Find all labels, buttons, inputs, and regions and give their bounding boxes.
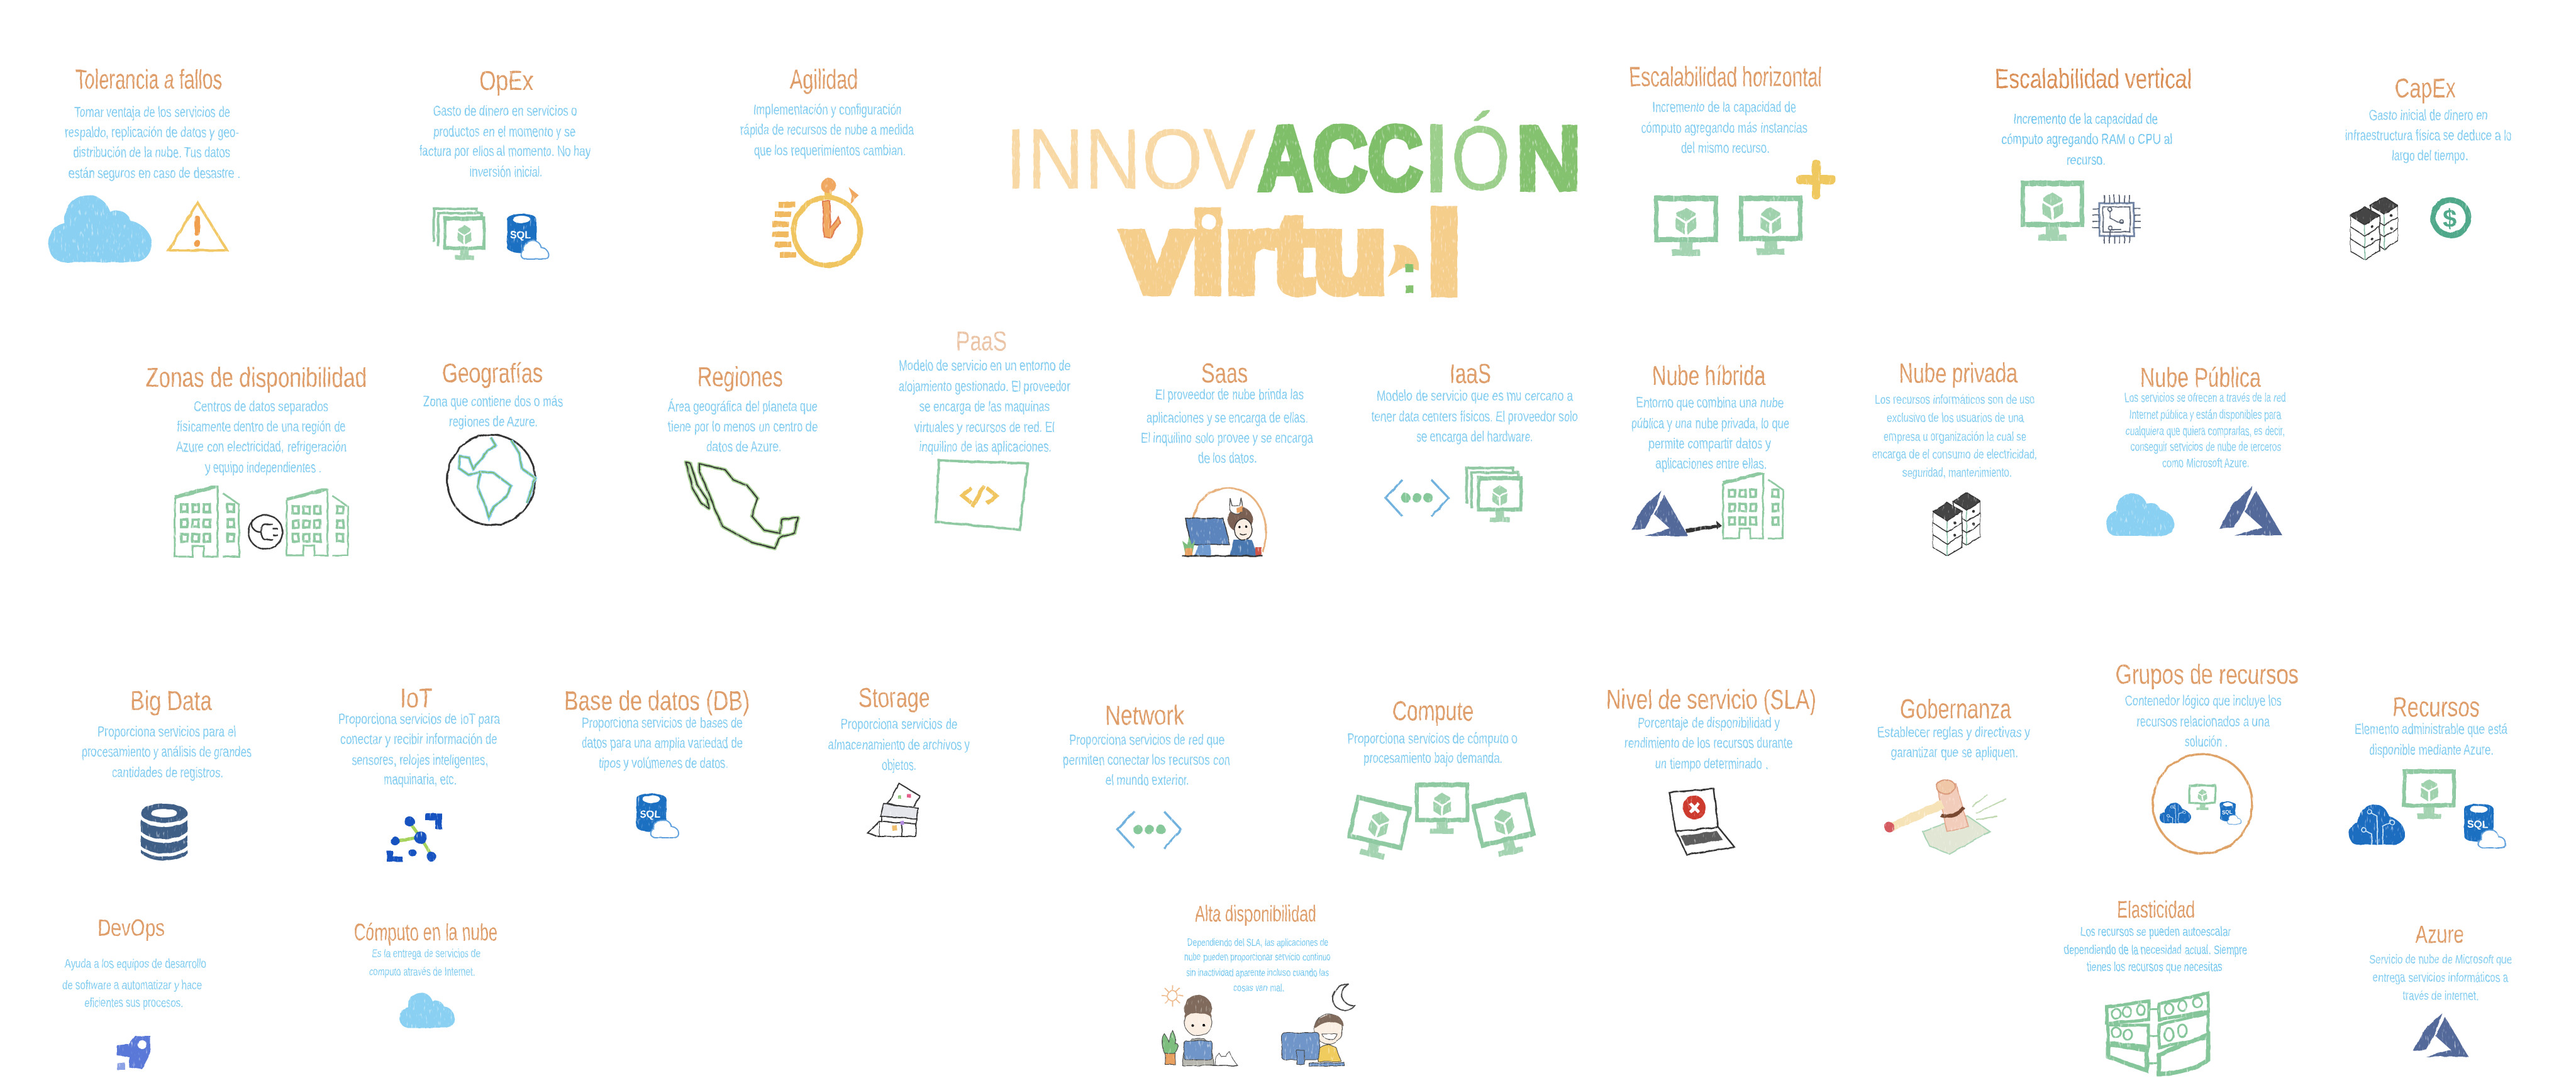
panel: Escalabilidad horizontal (1629, 62, 1836, 256)
description: objetos. (882, 757, 916, 773)
heading: Recursos (2392, 692, 2480, 723)
description: se encarga del hardware. (1416, 428, 1533, 445)
description (176, 398, 347, 475)
description: el mundo exterior. (1106, 772, 1189, 788)
icon: person at computer with cat (1182, 488, 1266, 556)
description (740, 101, 914, 158)
icon: chip (2092, 195, 2141, 243)
heading: Nivel de servicio (SLA) (1606, 684, 1816, 715)
description (82, 723, 252, 781)
icon: plug (248, 515, 282, 549)
panel: IaaS (1372, 358, 1578, 522)
icon: building (1723, 472, 1783, 538)
description: Gasto de dinero en servicios o (433, 103, 577, 119)
icon: sun (1162, 985, 1183, 1006)
description (899, 357, 1070, 455)
description: seguridad, mantenimiento. (1902, 466, 2012, 480)
description: almacenamiento de archivos y (828, 736, 970, 753)
icon: elastic servers (2107, 993, 2208, 1074)
description: tipos y volúmenes de datos. (599, 755, 728, 771)
description: Tomar ventaja de los servicios de (74, 104, 230, 120)
description: inversión inicial. (470, 164, 543, 180)
description: Área geográfica del planeta que (668, 398, 818, 414)
description (423, 393, 563, 430)
icon: virtual machines (1467, 468, 1523, 522)
icon: SQL database (2464, 804, 2506, 848)
title letter l: l (1429, 192, 1460, 316)
panel: Nube privada (1872, 358, 2037, 556)
heading: Nube híbrida (1652, 360, 1765, 391)
description: través de internet. (2403, 989, 2479, 1003)
icon: virtual machines (434, 209, 486, 260)
icon: monitor (2402, 769, 2456, 819)
heading: CapEx (2395, 73, 2456, 104)
heading: Nube Pública (2140, 362, 2261, 393)
description: del mismo recurso. (1681, 140, 1770, 156)
description (1347, 730, 1518, 766)
description: El inquilino solo provee y se encarga (1141, 430, 1313, 446)
description (582, 714, 743, 771)
description: de software a automatizar y hace (62, 979, 202, 992)
panel: Gobernanza (1877, 694, 2030, 854)
description: Es la entrega de servicios de (372, 947, 480, 960)
panel: DevOps (62, 915, 206, 1070)
description: datos para una amplia variedad de (582, 735, 743, 751)
description: tener data centers físicos. El proveedor solo (1372, 408, 1578, 425)
description: dependiendo de la necesidad actual. Siempre (2064, 943, 2247, 957)
description: recurso. (2067, 152, 2106, 168)
panel: Geografías (423, 358, 563, 525)
icon: dollar coin: $ (2443, 205, 2457, 233)
description (2124, 391, 2286, 470)
description: respaldo, replicación de datos y geo- (65, 124, 239, 140)
panel: Saas (1141, 358, 1313, 556)
description: rápida de recursos de nube a medida (740, 121, 914, 138)
description: cualquiera que quiera comprarlas, es decir, (2126, 425, 2285, 438)
description: Establecer reglas y directivas y (1877, 724, 2030, 740)
icon: building 2 (287, 489, 348, 555)
panel: Grupos de recursos (2116, 659, 2299, 853)
heading: Compute (1392, 696, 1474, 726)
description: nube pueden proporcionar servicio continuo (1184, 951, 1331, 963)
icon: cloud (48, 195, 152, 262)
icon: building 1 (175, 486, 239, 557)
heading: OpEx (479, 65, 533, 96)
description: conseguir servicios de nube de terceros (2131, 440, 2281, 454)
description: cómputo agregando más instancias (1641, 119, 1807, 136)
description (1877, 724, 2030, 760)
description: conectar y recibir información de (340, 731, 497, 747)
description: solución . (2185, 733, 2228, 750)
heading: Big Data (130, 686, 212, 716)
heading: Zonas de disponibilidad (146, 362, 367, 393)
icon: network (1385, 480, 1448, 516)
panel: Nube Pública (2106, 362, 2286, 536)
panel: CapEx (2345, 73, 2512, 260)
description: infraestructura física se deduce a lo (2345, 127, 2512, 143)
icon: SQL database (636, 794, 679, 838)
title letter: Ó: Ó (1451, 107, 1511, 209)
icon: monitor (2021, 181, 2084, 241)
panel: Azure (2369, 921, 2512, 1057)
description: encarga de el consumo de electricidad, (1872, 448, 2037, 462)
description: procesamiento bajo demanda. (1363, 750, 1502, 766)
description: permite compartir datos y (1648, 435, 1771, 452)
description: Proporciona servicios de bases de (582, 714, 743, 731)
icon: Azure logo (2413, 1013, 2468, 1057)
description: Incremento de la capacidad de (1652, 99, 1796, 115)
description: disponible mediante Azure. (2369, 742, 2494, 758)
description (1184, 936, 1331, 994)
description: Zona que contiene dos o más (423, 393, 563, 409)
panel: IoT (338, 683, 500, 862)
description: Proporciona servicios de IoT para (338, 711, 500, 727)
icon: plus (1796, 160, 1836, 199)
description (65, 104, 240, 181)
description: Dependiendo del SLA, las aplicaciones de (1187, 936, 1328, 948)
panel: Network (1063, 700, 1230, 848)
description: aplicaciones entre ellas. (1656, 455, 1767, 472)
description: tienes los recursos que necesitas (2087, 960, 2223, 974)
title word: N: N (1516, 107, 1582, 209)
description: eficientes sus procesos. (84, 996, 183, 1010)
panel: Zonas de disponibilidad (146, 362, 367, 557)
heading: Grupos de recursos (2116, 659, 2299, 690)
description: entrega servicios informáticos a (2373, 971, 2509, 985)
icon: SQL database (2220, 801, 2241, 824)
description: cantidades de registros. (112, 764, 223, 781)
description: que los requerimientos cambian. (754, 142, 906, 158)
description: Servicio de nube de Microsoft que (2369, 953, 2512, 967)
description: inquilino de las aplicaciones. (919, 438, 1052, 455)
description: Proporciona servicios para el (97, 723, 236, 740)
description (1631, 394, 1789, 472)
description: Azure con electricidad, refrigeración (176, 438, 347, 455)
description: Contenedor lógico que incluye los (2125, 692, 2282, 709)
description: Internet pública y están disponibles para (2129, 408, 2282, 422)
panel: Alta disponibilidad (1162, 901, 1355, 1066)
description: Proporciona servicios de red que (1069, 731, 1224, 748)
heading: Saas (1201, 358, 1248, 389)
description: tiene por lo menos un centro de (668, 418, 818, 435)
description: cosas van mal. (1233, 982, 1284, 994)
title word: virtu: virtu (1123, 192, 1387, 316)
icon: SQL database (507, 214, 548, 259)
description: largo del tiempo. (2392, 147, 2468, 164)
panel: Compute (1344, 696, 1539, 864)
heading: Cómputo en la nube (354, 920, 497, 946)
panel: Storage (828, 682, 970, 836)
icon: globe (447, 435, 535, 525)
icon: laptop with error (1669, 789, 1735, 855)
description: Proporciona servicios de cómputo o (1347, 730, 1518, 747)
icon: SQL database: SQL (2222, 809, 2233, 815)
heading: Base de datos (DB) (564, 686, 750, 716)
description: sensores, relojes inteligentes, (352, 752, 488, 768)
panel: Base de datos (DB) (564, 686, 750, 838)
description (2064, 925, 2247, 974)
description: Centros de datos separados (194, 398, 328, 414)
icon: centre monitor (1415, 782, 1469, 834)
description: físicamente dentro de una región de (177, 418, 346, 435)
description: empresa u organización la cual se (1884, 430, 2026, 444)
heading: PaaS (956, 326, 1007, 357)
description (1641, 99, 1807, 156)
icon: Azure logo (2219, 486, 2282, 535)
description (1063, 731, 1230, 788)
heading: Nube privada (1899, 358, 2018, 389)
description: factura por ellos al momento. No hay (419, 143, 591, 159)
description: procesamiento y análisis de grandes (82, 743, 252, 760)
description (2125, 692, 2282, 750)
icon: person at monitor (1282, 1014, 1345, 1066)
icon: monitor 2 (1739, 196, 1802, 255)
description: garantizar que se apliquen. (1891, 744, 2018, 760)
panel: Elasticidad (2064, 897, 2247, 1074)
icon: moon (1333, 984, 1355, 1010)
icon: Mexico map (686, 462, 798, 548)
panel: OpEx (419, 65, 591, 260)
description: Gasto inicial de dinero en (2369, 107, 2488, 123)
description (419, 103, 591, 180)
description (1872, 393, 2037, 480)
icon: code window (936, 460, 1028, 530)
panel: Recursos (2349, 692, 2507, 848)
icon: network (1118, 811, 1181, 848)
description (2001, 111, 2172, 168)
icon: SQL database: SQL (510, 229, 531, 241)
panel: Cómputo en la nube (354, 920, 497, 1028)
icon: warning triangle (169, 203, 227, 250)
heading: Alta disponibilidad (1195, 901, 1316, 926)
description (668, 398, 818, 455)
description: rendimiento de los recursos durante (1624, 735, 1792, 751)
description: Ayuda a los equipos de desarrollo (65, 957, 206, 971)
heading: DevOps (97, 915, 165, 942)
description (1624, 714, 1792, 772)
description: Los servicios se ofrecen a través de la red (2124, 391, 2286, 405)
description: distribución de la nube. Tus datos (73, 144, 230, 160)
panel: Nube híbrida (1631, 360, 1789, 538)
title stylised a (1387, 245, 1419, 277)
title word: ACC: ACC (1258, 107, 1423, 209)
description: Incremento de la capacidad de (2014, 111, 2158, 127)
description (369, 947, 480, 978)
icon: cloud (400, 992, 455, 1028)
description: Entorno que combina una nube (1636, 394, 1784, 411)
description: de los datos. (1198, 450, 1257, 466)
icon: IoT network (387, 813, 442, 862)
description: Los recursos se pueden autoescalar (2080, 925, 2231, 939)
heading: Tolerancia a fallos (75, 64, 222, 95)
description: Elemento administrable que está (2355, 721, 2507, 737)
icon: cloud (2106, 493, 2174, 536)
description: Modelo de servicio que es mu cercano a (1377, 387, 1573, 404)
heading: Agilidad (790, 64, 858, 95)
description: Proporciona servicios de (841, 716, 957, 732)
description (1141, 386, 1313, 466)
description: datos de Azure. (706, 438, 782, 455)
icon: monitor (2189, 784, 2216, 810)
description (338, 711, 500, 787)
description: y equipo independientes . (205, 459, 321, 475)
heading: Escalabilidad horizontal (1629, 62, 1822, 92)
heading: Gobernanza (1900, 694, 2011, 725)
heading: IaaS (1450, 358, 1491, 389)
description: maquinaria, etc. (384, 771, 457, 787)
icon: SQL database: SQL (2467, 818, 2488, 830)
description: están seguros en caso de desastre . (69, 165, 240, 181)
icon: stopwatch (772, 178, 860, 265)
description: sin inactividad aparente incluso cuando las (1186, 967, 1329, 979)
description (62, 957, 206, 1010)
description: exclusivo de los usuarios de una (1887, 411, 2024, 425)
description: cómputo agregando RAM o CPU al (2001, 131, 2172, 147)
icon: database stack (141, 804, 187, 860)
panel: Escalabilidad vertical (1995, 64, 2192, 243)
description: Los recursos informáticos son de uso (1875, 393, 2035, 407)
icon: Azure logo (1631, 491, 1688, 536)
icon: cloud circuit (2160, 803, 2191, 823)
heading: Storage (858, 682, 930, 713)
title ring dot (1198, 211, 1219, 233)
heading: Escalabilidad vertical (1995, 64, 2192, 94)
icon: left monitor (1344, 794, 1412, 864)
icon: gavel (1884, 780, 2006, 854)
description (2369, 953, 2512, 1003)
description (828, 716, 970, 773)
icon: cloud circuit (2349, 804, 2405, 845)
description: Porcentaje de disponibilidad y (1638, 714, 1780, 731)
arrow: connection to building (1685, 521, 1722, 533)
description (1372, 387, 1578, 445)
panel: Big Data (82, 686, 252, 860)
description: virtuales y recursos de red. El (914, 419, 1055, 435)
icon: monitor 1 (1654, 196, 1718, 256)
icon: group circle (2153, 754, 2252, 853)
description: permiten conectar los recursos con (1063, 752, 1230, 768)
title: Innovacción virtual (1005, 107, 1582, 316)
panel: Tolerancia a fallos (48, 64, 240, 262)
icon: servers (2350, 197, 2398, 260)
panel: Regiones (668, 362, 818, 548)
description: un tiempo determinado . (1655, 755, 1768, 772)
icon: servers (1933, 492, 1980, 556)
heading: Network (1105, 700, 1185, 731)
title word: INNOV: INNOV (1005, 111, 1256, 208)
icon: person with laptop, plant and cat (1162, 995, 1238, 1065)
panel: Agilidad (740, 64, 914, 265)
description: productos en el momento y se (433, 123, 575, 140)
description: El proveedor de nube brinda las (1155, 386, 1304, 403)
description: Modelo de servicio en un entorno de (899, 357, 1070, 374)
icon: dollar coin (2433, 200, 2468, 235)
title letter: I: I (1425, 107, 1448, 209)
description: computo através de Internet. (369, 965, 475, 978)
heading: Geografías (442, 358, 543, 389)
description (2355, 721, 2507, 758)
panel: PaaS (899, 326, 1070, 530)
description: recursos relacionados a una (2136, 713, 2270, 730)
description: regiones de Azure. (449, 413, 538, 430)
icon: right monitor (1471, 792, 1539, 861)
heading: Elasticidad (2117, 897, 2195, 923)
description: aplicaciones y se encarga de ellas. (1146, 409, 1308, 426)
heading: Azure (2415, 921, 2464, 948)
heading: IoT (400, 683, 433, 714)
description: se encarga de las maquinas (919, 398, 1050, 414)
icon: SQL database: SQL (640, 808, 660, 820)
description: alojamiento gestionado. El proveedor (899, 378, 1070, 394)
icon: files box (868, 784, 919, 836)
heading: Regiones (697, 362, 783, 392)
description: pública y una nube privada, lo que (1631, 415, 1789, 431)
title green colon: : (1400, 243, 1419, 306)
panel: Nivel de servicio (SLA) (1606, 684, 1816, 855)
description: Implementación y configuración (753, 101, 902, 118)
description: como Microsoft Azure. (2162, 457, 2250, 470)
description (2345, 107, 2512, 164)
icon: DevOps rocket (117, 1036, 150, 1070)
